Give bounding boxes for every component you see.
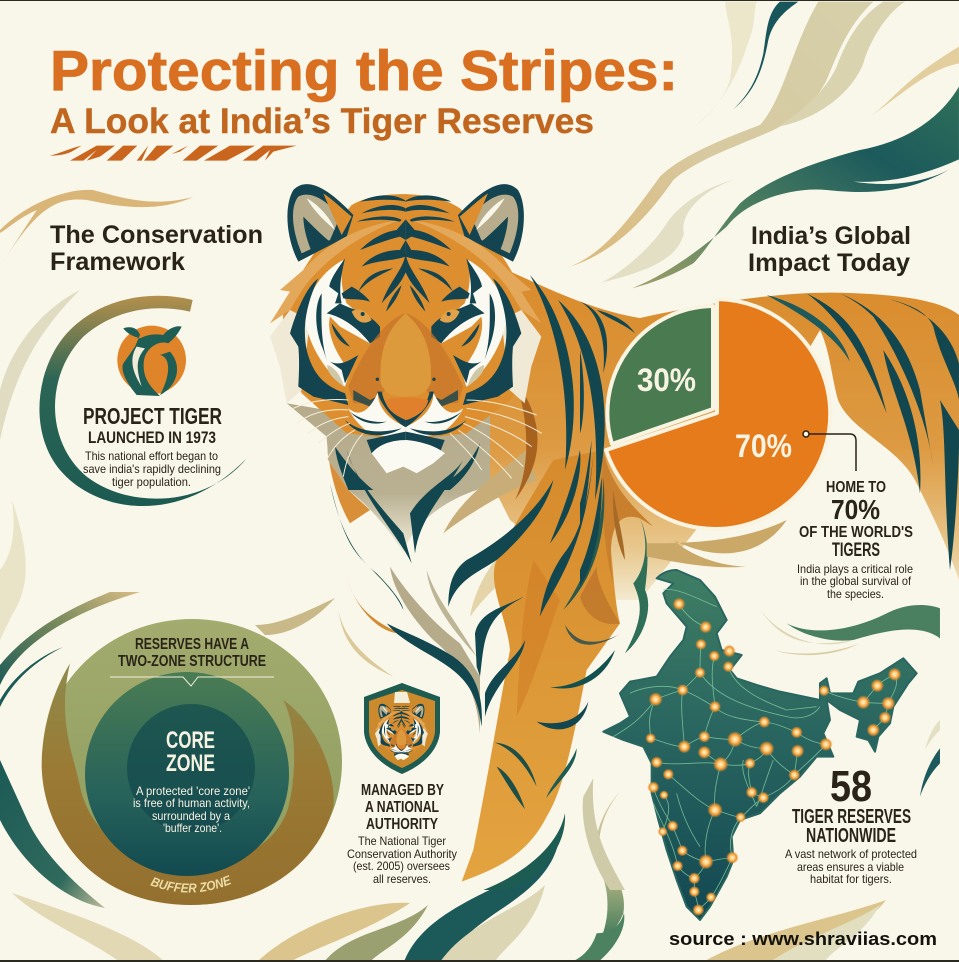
- authority text: (est. 2005) oversees: [353, 859, 450, 873]
- panel: 58 tiger reserves: A vast network of protected: [785, 847, 917, 861]
- panel: two-zone structure: [42, 619, 342, 905]
- panel: 58 tiger reserves: [785, 762, 917, 886]
- project tiger text: [83, 403, 222, 489]
- core circle: [127, 704, 255, 832]
- tiger whiskers: [290, 400, 542, 478]
- tiger head: [270, 184, 541, 473]
- crescent ring: [39, 296, 247, 506]
- title: A Look at India’s Tiger Reserves: [50, 102, 594, 141]
- callout: home to 70 percent: HOME TO: [826, 479, 886, 496]
- panel: project tiger: [39, 296, 247, 506]
- core zone text: surrounded by a: [152, 809, 230, 823]
- background swooshes bottom: [257, 835, 886, 962]
- middle ring: [85, 672, 289, 876]
- slice: 70 percent: [606, 299, 830, 529]
- project tiger text: save india's rapidly declining: [83, 462, 221, 476]
- title stripe decoration: [50, 146, 297, 161]
- core zone text: is free of human activity,: [133, 796, 250, 810]
- source credit: source : www.shraviias.com: [669, 929, 937, 949]
- authority text: [347, 782, 457, 886]
- callout: home to 70 percent: the species.: [827, 587, 884, 601]
- authority text: A NATIONAL: [365, 799, 439, 816]
- heading: conservation framework: Framework: [50, 248, 185, 276]
- project tiger text: PROJECT TIGER: [83, 403, 222, 429]
- buffer zone label: BUFFER ZONE: [150, 875, 231, 893]
- panel: 58 tiger reserves: 58: [830, 762, 872, 811]
- pie labels: 30%: [637, 362, 696, 398]
- project tiger text: tiger population.: [112, 475, 191, 489]
- zone header: TWO-ZONE STRUCTURE: [118, 653, 266, 670]
- outer buffer circle: [42, 619, 342, 905]
- callout: home to 70 percent: 70%: [831, 494, 880, 525]
- callout: home to 70 percent: in the global survival of: [800, 574, 912, 588]
- panel: 58 tiger reserves: habitat for tigers.: [810, 872, 892, 886]
- shoulder and front leg: [330, 450, 653, 890]
- pie labels: [637, 362, 792, 464]
- slice: 30 percent: [607, 306, 713, 444]
- panel: 58 tiger reserves: areas ensures a viable: [797, 860, 904, 874]
- authority text: Conservation Authority: [347, 847, 457, 861]
- project tiger text: This national effort began to: [85, 449, 218, 463]
- icon: project tiger emblem: [117, 326, 186, 396]
- callout: home to 70 percent: TIGERS: [832, 540, 880, 561]
- project tiger text: LAUNCHED IN 1973: [88, 428, 216, 447]
- background swooshes top right: [565, 2, 959, 288]
- heading: conservation framework: The Conservation: [50, 221, 263, 249]
- back stripes: [580, 293, 959, 587]
- callout: home to 70 percent: [797, 479, 913, 601]
- background swooshes left: [0, 190, 335, 962]
- background swooshes right: [568, 605, 940, 962]
- map network lines: [613, 589, 897, 910]
- authority text: The National Tiger: [358, 834, 446, 848]
- tiger neck: [287, 400, 537, 553]
- heading: global impact: [748, 222, 911, 277]
- core zone text: CORE: [166, 727, 215, 754]
- tiger body: [330, 262, 959, 890]
- map reserve dots: [645, 598, 901, 916]
- authority text: all reserves.: [373, 872, 431, 886]
- icon: tiger shield: [364, 683, 440, 774]
- heading: global impact: India’s Global: [751, 222, 911, 250]
- panel: national authority: [347, 683, 457, 886]
- map landmass: [603, 570, 917, 920]
- panel: 58 tiger reserves: NATIONWIDE: [806, 825, 896, 847]
- india map: [603, 570, 917, 920]
- authority text: AUTHORITY: [366, 816, 438, 833]
- zone header: RESERVES HAVE A: [135, 636, 249, 653]
- pie chart: [606, 299, 830, 529]
- callout leader line: [803, 431, 856, 471]
- pie labels: 70%: [735, 428, 792, 464]
- zone header: [110, 636, 274, 686]
- heading: conservation framework: [50, 221, 263, 276]
- core zone text: 'buffer zone'.: [163, 821, 222, 835]
- title: Protecting the Stripes:: [50, 39, 678, 103]
- callout: home to 70 percent: India plays a critical role: [797, 562, 913, 576]
- core zone text: [133, 727, 250, 835]
- core zone text: A protected 'core zone': [136, 784, 250, 798]
- title: [50, 39, 678, 141]
- core zone text: ZONE: [166, 750, 215, 777]
- callout: home to 70 percent: OF THE WORLD'S: [799, 524, 913, 541]
- authority text: MANAGED BY: [361, 782, 444, 799]
- heading: global impact: Impact Today: [748, 249, 910, 277]
